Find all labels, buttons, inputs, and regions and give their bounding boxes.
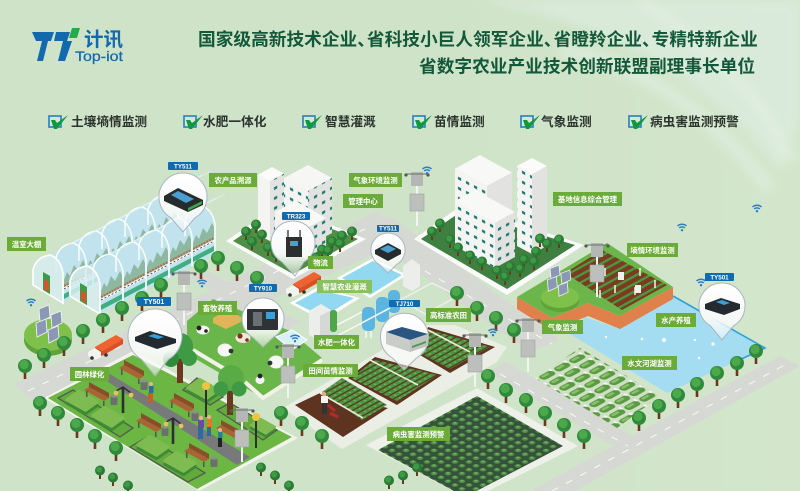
callout: TY511 irrigation pond (371, 225, 405, 273)
ponds: smart irrigation (290, 258, 407, 321)
callout: TY501 park (128, 297, 182, 376)
callout: TY501 park: TY501 (144, 299, 164, 306)
label: smart irrigation: 智慧农业灌溉 (322, 282, 367, 292)
label: greenhouse (7, 237, 46, 251)
label: base info: 基地信息综合管理 (558, 195, 618, 204)
feature checklist (49, 114, 739, 129)
label: livestock (198, 301, 237, 315)
building: management centre (258, 165, 332, 258)
label: high standard farmland: 高标准农田 (430, 311, 467, 320)
wifi icons (26, 167, 762, 342)
soil probes (600, 268, 655, 298)
check item: soil moisture: 土壤墒情监测 (71, 114, 147, 129)
label: weather: 气象监测 (548, 323, 577, 332)
label: field seedling: 田间苗情监测 (308, 366, 353, 376)
check item: smart irrigation: 智慧灌溉 (325, 114, 376, 129)
check item: seedling (413, 114, 485, 129)
label: weather environment: 气象环境监测 (353, 176, 398, 185)
fertigation equipment and tanks (276, 259, 420, 350)
trucks (88, 272, 321, 360)
label: aquaculture (656, 313, 696, 327)
callout: TY511 greenhouse (159, 162, 207, 232)
label: weather (542, 320, 583, 334)
logo: Top-iot (32, 28, 123, 64)
callout: TJ710 farmland (381, 300, 428, 370)
label: high standard farmland (426, 308, 471, 322)
label: hydrology (622, 356, 677, 370)
label: fertigation: 水肥一体化 (318, 338, 356, 347)
farmer with tiller (321, 392, 338, 417)
check item: pest: 病虫害监测预警 (650, 114, 739, 129)
callout: TY511 irrigation pond: TY511 (379, 226, 398, 233)
callout: TY501 aquaculture (699, 273, 745, 340)
label: field seedling (303, 364, 358, 377)
label: traceability: 农产品溯源 (215, 176, 252, 185)
label: landscaping: 园林绿化 (75, 370, 105, 379)
callout: TY501 aquaculture: TY501 (710, 274, 729, 281)
callout: TY910 pasture: TY910 (254, 285, 273, 292)
farmland: fields and crops (295, 327, 495, 437)
label: greenhouse: 温室大棚 (12, 240, 41, 249)
decorative light swirl top right (470, 0, 800, 190)
check item: weather: 气象监测 (541, 114, 592, 129)
label: soil environment (627, 243, 678, 257)
park (44, 333, 298, 491)
plot: management centre base (226, 204, 366, 279)
logo: Top-iot: Top-iot (75, 48, 123, 64)
solar array: farm plot (541, 265, 579, 312)
check item: weather (521, 114, 592, 129)
logo: Top-iot: 计讯 (84, 29, 123, 51)
hay bales (213, 310, 241, 329)
field: pest monitoring (366, 388, 578, 491)
people (148, 382, 222, 447)
label: pest: 病虫害监测预警 (393, 430, 445, 439)
sensor poles (171, 172, 610, 462)
roads (14, 212, 800, 491)
callout: TR323 management centre (271, 212, 315, 276)
label: landscaping (70, 367, 109, 381)
label: base info (553, 192, 622, 206)
label: logistics (308, 256, 333, 269)
trees on building plots (241, 218, 564, 285)
heading line 2: 省数字农业产业技术创新联盟副理事长单位 (419, 56, 755, 76)
label: soil environment: 墒情环境监测 (630, 246, 675, 255)
check item: smart irrigation (303, 114, 376, 129)
solar array: left (24, 305, 72, 356)
label: smart irrigation (317, 280, 372, 293)
callout: TR323 management centre: TR323 (287, 213, 306, 220)
hedge beds (58, 378, 277, 482)
callout: TY511 greenhouse: TY511 (174, 163, 193, 170)
farm plot: soil moisture monitoring (517, 243, 673, 331)
label: pest (387, 427, 450, 441)
green labels (7, 173, 696, 441)
large park trees (163, 333, 246, 415)
field: hydrology lake monitoring crops (535, 348, 660, 428)
label: traceability (209, 173, 257, 187)
field surround: standard farmland (283, 283, 507, 449)
label: management centre: 管理中心 (348, 197, 378, 206)
heading line 1: 国家级高新技术企业、省科技小巨人领军企业、省瞪羚企业、专精特新企业 (198, 28, 758, 50)
greenhouse row: front (70, 194, 225, 314)
cows and sheep (196, 326, 284, 384)
label: livestock: 畜牧养殖 (203, 304, 233, 313)
perimeter trees (18, 251, 763, 491)
label: aquaculture: 水产养殖 (661, 316, 691, 325)
pasture (187, 299, 322, 398)
plot: base information management (414, 205, 584, 295)
label: hydrology: 水文河湖监测 (627, 359, 672, 368)
label: logistics: 物流 (313, 258, 328, 268)
callout: TY910 pasture (242, 284, 284, 347)
label: weather environment (349, 173, 402, 187)
greenhouse row: back (33, 171, 211, 303)
check item: fertigation: 水肥一体化 (203, 114, 267, 129)
water: aquaculture (570, 296, 765, 393)
hedges, benches and lamps (67, 360, 275, 474)
label: management centre (343, 194, 383, 208)
building: base information management (455, 155, 547, 268)
check item: seedling: 苗情监测 (434, 114, 485, 129)
label: fertigation (314, 335, 359, 349)
callout: TJ710 farmland: TJ710 (396, 301, 414, 308)
